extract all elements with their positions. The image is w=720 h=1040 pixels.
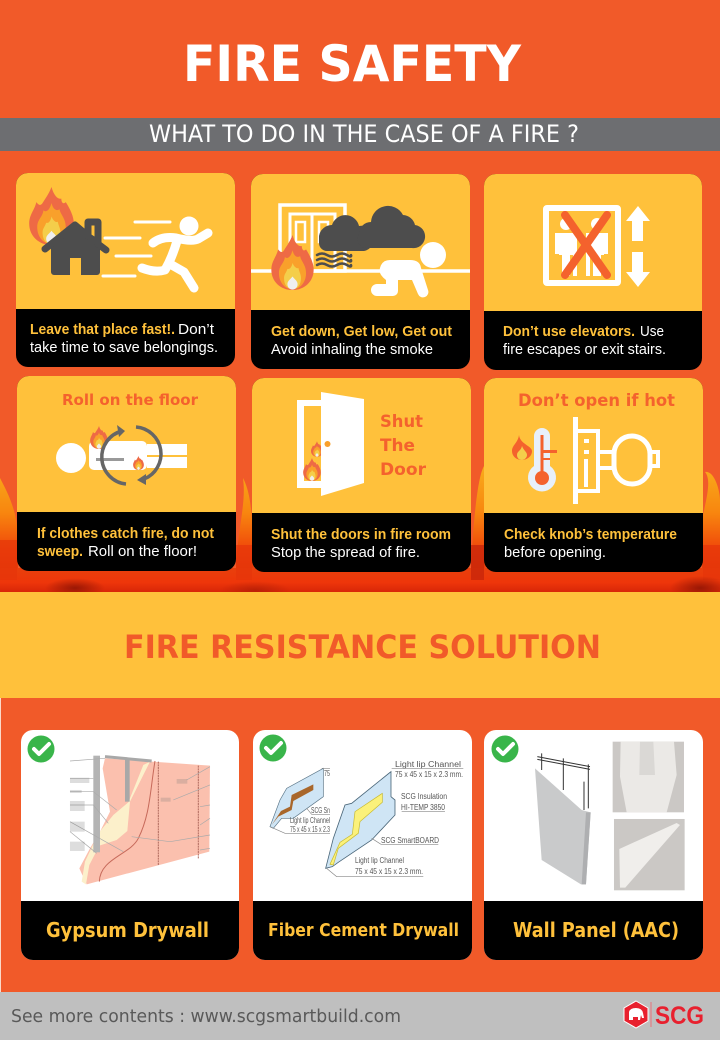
icon: open door with flames [297, 392, 364, 496]
icon: door knob [573, 417, 658, 504]
diagram: aac panels [535, 742, 685, 890]
section band: fire resistance solution: FIRE RESISTANCE SOLUTION [124, 628, 601, 666]
panel: gypsum drywall [21, 730, 239, 960]
diagram labels: 75 x 45 x 15 x 2.3 [290, 825, 330, 834]
panel: leave fast [16, 173, 235, 367]
diagram labels: 75 x 45 x 15 x 2.3 mm. [355, 867, 423, 876]
panel: get low [251, 174, 470, 369]
heading: shut the door: The [380, 436, 415, 456]
subtitle bar: WHAT TO DO IN THE CASE OF A FIRE ? [149, 120, 579, 148]
icon: elevator with cross [546, 208, 618, 283]
icon: crawling person [371, 242, 446, 297]
icon: check badge [28, 736, 54, 762]
panel: fiber cement drywall [253, 730, 472, 960]
caption: leave fast: Don’t [178, 321, 215, 338]
caption: shut the door: Stop the spread of fire. [271, 544, 420, 561]
panel: roll on floor [17, 376, 236, 571]
panel: hot knob [484, 378, 703, 572]
caption: roll on floor: If clothes catch fire, do not [37, 525, 214, 542]
panel: shut the door [252, 378, 471, 572]
logo: SCG [624, 1001, 704, 1030]
background flames [0, 466, 720, 600]
diagram labels: SCG Sn [311, 806, 330, 815]
caption: get low [271, 323, 452, 358]
diagram labels: Light lip Channel [355, 856, 404, 865]
heading: roll on the floor: Roll on the floor [62, 391, 199, 409]
icon: up and down arrows [626, 206, 650, 287]
caption: get low: Get down, Get low, Get out [271, 323, 452, 340]
heading: don't open if hot: Don’t open if hot [518, 391, 675, 411]
diagram: gypsum wall [70, 756, 210, 884]
icon: running person [103, 216, 208, 288]
icon: flame [271, 235, 314, 290]
diagram labels [290, 760, 463, 876]
caption: hot knob: before opening. [504, 544, 606, 561]
caption: no elevators: fire escapes or exit stairs. [503, 341, 666, 358]
diagram labels: SCG SmartBOARD [381, 836, 439, 845]
caption: shut the door [271, 526, 451, 561]
diagram labels: SCG Insulation [401, 792, 447, 801]
icon: check badge [260, 734, 286, 762]
footer [0, 992, 720, 1040]
label: gypsum drywall: Gypsum Drywall [46, 918, 209, 942]
caption: hot knob: Check knob’s temperature [504, 526, 677, 543]
icon: door frame and floor [251, 205, 470, 271]
caption: roll on floor: Roll on the floor! [88, 543, 197, 560]
caption: no elevators [503, 323, 666, 358]
diagram labels: Light lip Channel [395, 760, 461, 769]
icon: burning house [29, 187, 106, 275]
caption: leave fast: take time to save belongings. [30, 339, 218, 356]
icon: rolling person [56, 425, 187, 485]
diagram labels: 75 x 45 x 15 x 2.3 mm. [395, 770, 463, 779]
panel: wall panel aac [484, 730, 703, 960]
caption: leave fast [30, 321, 218, 356]
panel: no elevators [484, 174, 702, 370]
caption: shut the door: Shut the doors in fire room [271, 526, 451, 543]
icon: check badge [492, 736, 518, 762]
diagram labels: Light lip Channel [290, 816, 330, 825]
caption: no elevators: Use [640, 323, 664, 340]
logo: SCG: SCG [655, 1002, 704, 1030]
icon: smoke clouds [317, 206, 425, 266]
icon: thermometer [512, 428, 557, 491]
label: wall panel aac: Wall Panel (AAC) [513, 918, 679, 942]
caption: no elevators: Don’t use elevators. [503, 323, 635, 340]
diagram labels: HI-TEMP 3850 [401, 803, 445, 812]
heading: shut the door [380, 412, 427, 480]
heading: shut the door: Shut [380, 412, 423, 432]
diagram: fiber cement walls [270, 768, 463, 877]
heading: shut the door: Door [380, 460, 427, 480]
title: FIRE SAFETY [183, 35, 522, 93]
caption: roll on floor [37, 525, 214, 560]
section band: fire resistance solution [0, 592, 720, 698]
caption: hot knob [504, 526, 677, 561]
subtitle bar [0, 118, 720, 151]
diagram labels: 75 [324, 769, 330, 778]
caption: get low: Avoid inhaling the smoke [271, 341, 433, 358]
caption: leave fast: Leave that place fast!. [30, 321, 175, 338]
caption: roll on floor: sweep. [37, 543, 83, 560]
label: fiber cement drywall: Fiber Cement Drywall [268, 920, 459, 941]
footer link text: See more contents : www.scgsmartbuild.com [11, 1006, 401, 1027]
